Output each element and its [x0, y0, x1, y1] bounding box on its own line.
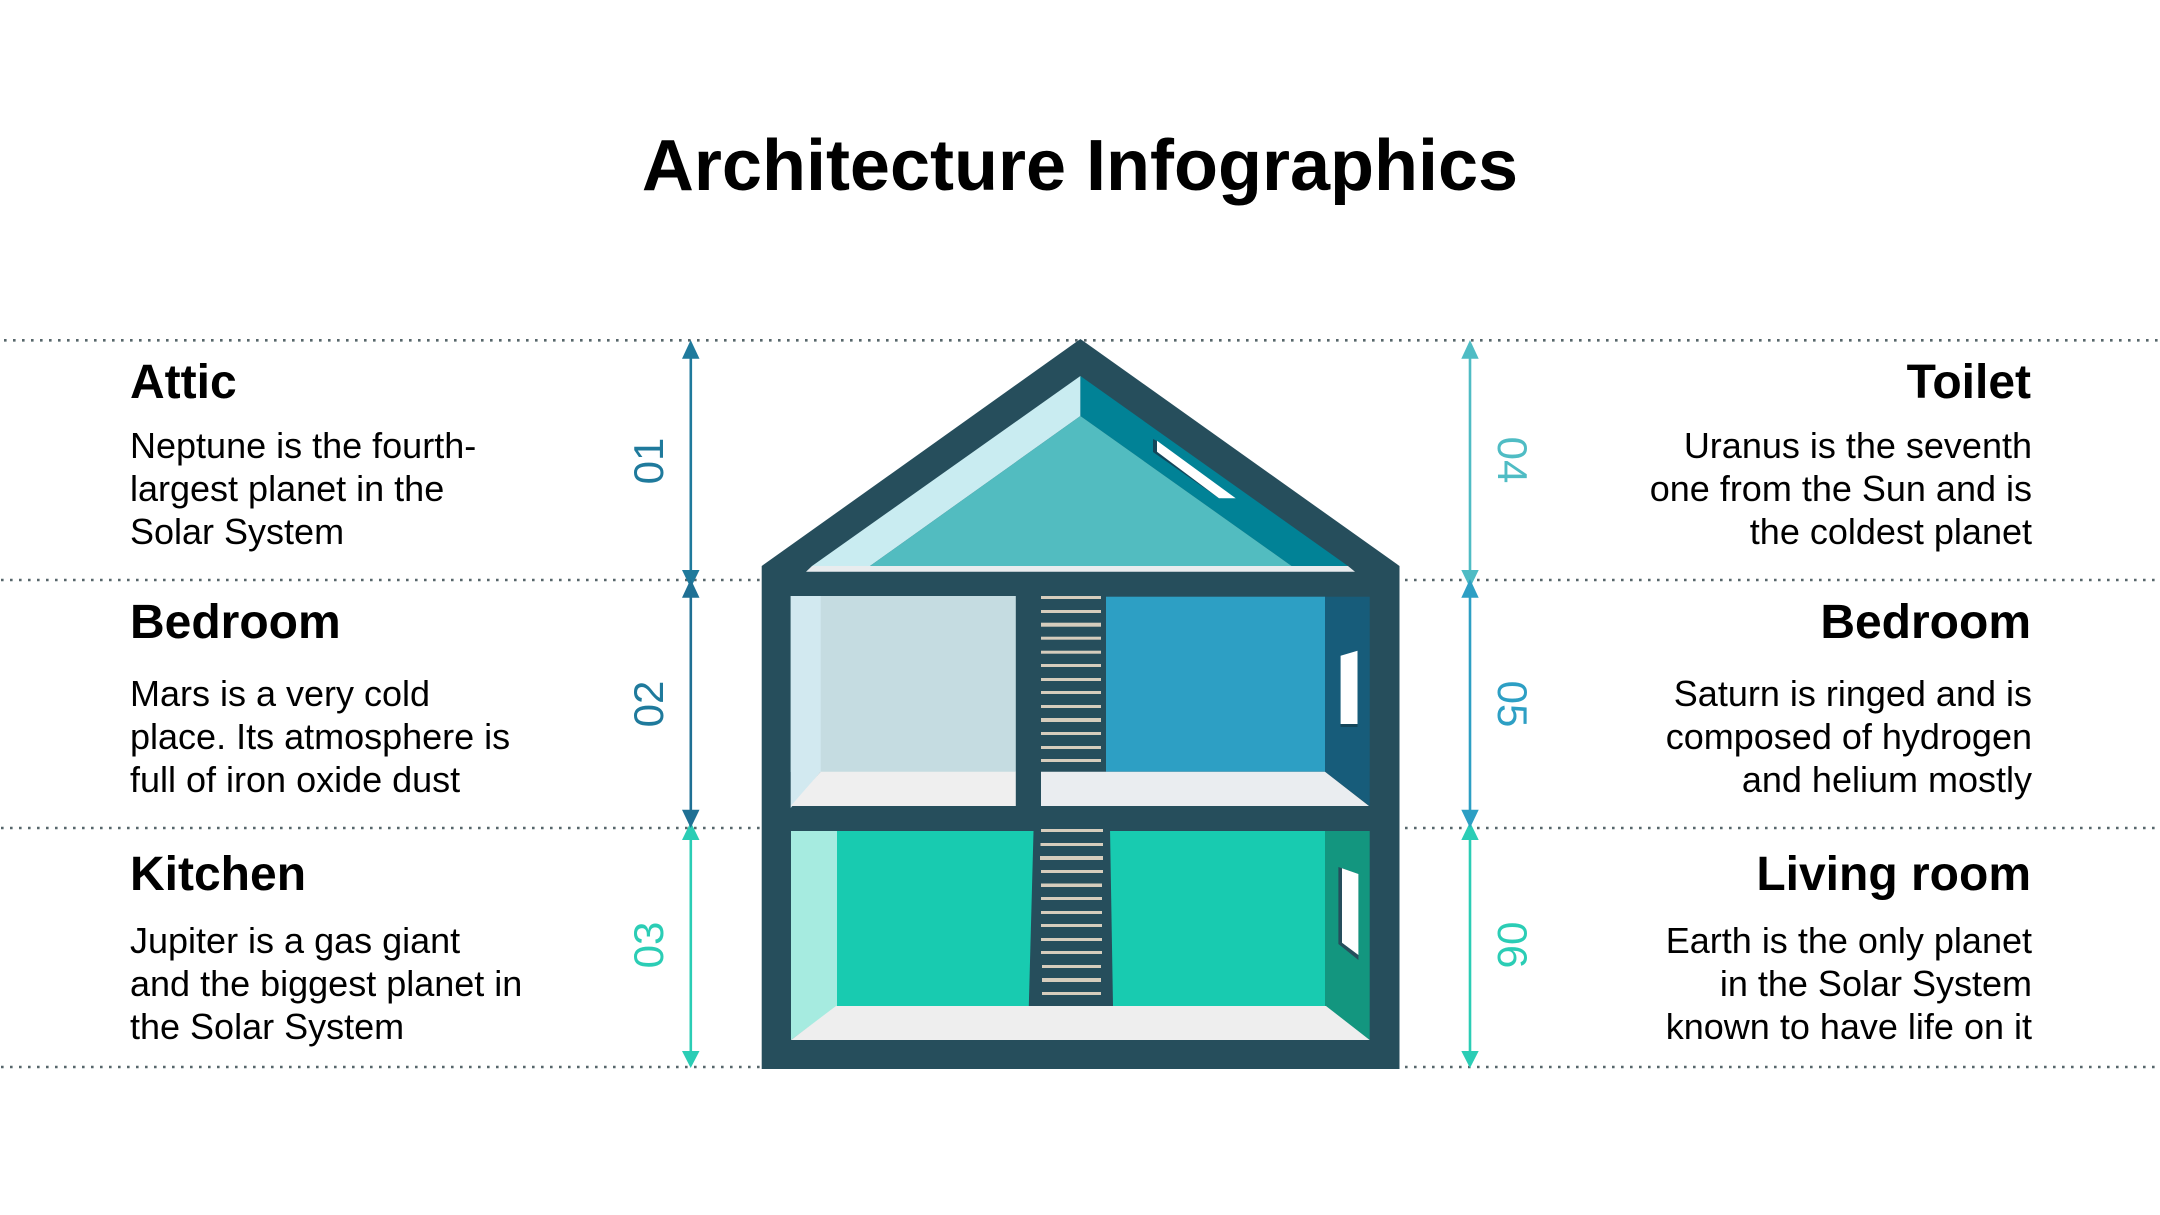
panel: bedroom right text: Saturn is ringed and is	[1674, 673, 2032, 714]
panel: kitchen text: the Solar System	[130, 1006, 404, 1047]
arrow: level 01 span	[682, 340, 700, 588]
living room and kitchen	[791, 828, 1370, 1040]
panel: bedroom right text: composed of hydrogen	[1666, 716, 2032, 757]
panel: toilet text: Toilet	[1907, 356, 2031, 409]
panel: attic text: Attic	[130, 356, 237, 409]
bedroom left room	[791, 596, 1016, 808]
panel: kitchen text	[130, 848, 522, 1047]
bedroom right room	[1041, 597, 1370, 806]
arrow: level 02 span	[682, 579, 700, 828]
panel: living room text	[1666, 848, 2032, 1047]
arrow: level 04 span	[1461, 340, 1479, 588]
panel: bedroom left text: Mars is a very cold	[130, 673, 430, 714]
panel: kitchen text: Kitchen	[130, 848, 306, 901]
attic floor	[806, 566, 1355, 572]
panel: attic text	[130, 356, 476, 552]
icon: ground floor window	[1338, 867, 1358, 960]
panel: toilet text: one from the Sun and is	[1650, 468, 2032, 509]
number 03: 03	[625, 922, 672, 968]
panel: living room text: known to have life on it	[1666, 1006, 2032, 1047]
panel: toilet text: the coldest planet	[1750, 511, 2032, 552]
panel: attic text: Neptune is the fourth-	[130, 425, 476, 466]
arrow: level 03 span	[682, 822, 700, 1068]
panel: bedroom right text	[1666, 596, 2032, 800]
panel: living room text: Living room	[1756, 848, 2031, 901]
house illustration	[762, 339, 1400, 1069]
panel: bedroom left text: Bedroom	[130, 596, 341, 649]
title: Architecture Infographics	[642, 126, 1518, 206]
arrow: level 06 span	[1461, 822, 1479, 1068]
arrow: level 05 span	[1461, 579, 1479, 828]
panel: bedroom right text: Bedroom	[1820, 596, 2031, 649]
icon: bedroom window	[1341, 651, 1358, 727]
upper staircase	[1041, 596, 1101, 762]
panel: kitchen text: Jupiter is a gas giant	[130, 920, 460, 961]
panel: living room text: in the Solar System	[1720, 963, 2032, 1004]
number 01: 01	[625, 438, 672, 484]
lower staircase	[1040, 829, 1103, 995]
panel: bedroom right text: and helium mostly	[1742, 759, 2032, 800]
house shell	[762, 339, 1400, 1069]
stair shaft	[1029, 828, 1113, 1006]
panel: toilet text: Uranus is the seventh	[1684, 425, 2032, 466]
number 05: 05	[1489, 681, 1536, 727]
panel: bedroom left text: full of iron oxide dust	[130, 759, 460, 800]
icon: roof window	[1153, 439, 1236, 498]
number 06: 06	[1489, 922, 1536, 968]
attic back wall	[870, 416, 1292, 566]
panel: bedroom left text	[130, 596, 510, 800]
panel: kitchen text: and the biggest planet in	[130, 963, 522, 1004]
panel: attic text: largest planet in the	[130, 468, 444, 509]
panel: toilet text	[1650, 356, 2032, 552]
attic room	[806, 376, 1355, 572]
attic left slope	[812, 376, 1080, 566]
panel: bedroom left text: place. Its atmosphere is	[130, 716, 510, 757]
number 04: 04	[1489, 437, 1536, 483]
panel: living room text: Earth is the only planet	[1666, 920, 2032, 961]
attic right slope	[1080, 376, 1348, 566]
panel: attic text: Solar System	[130, 511, 344, 552]
number 02: 02	[625, 681, 672, 727]
